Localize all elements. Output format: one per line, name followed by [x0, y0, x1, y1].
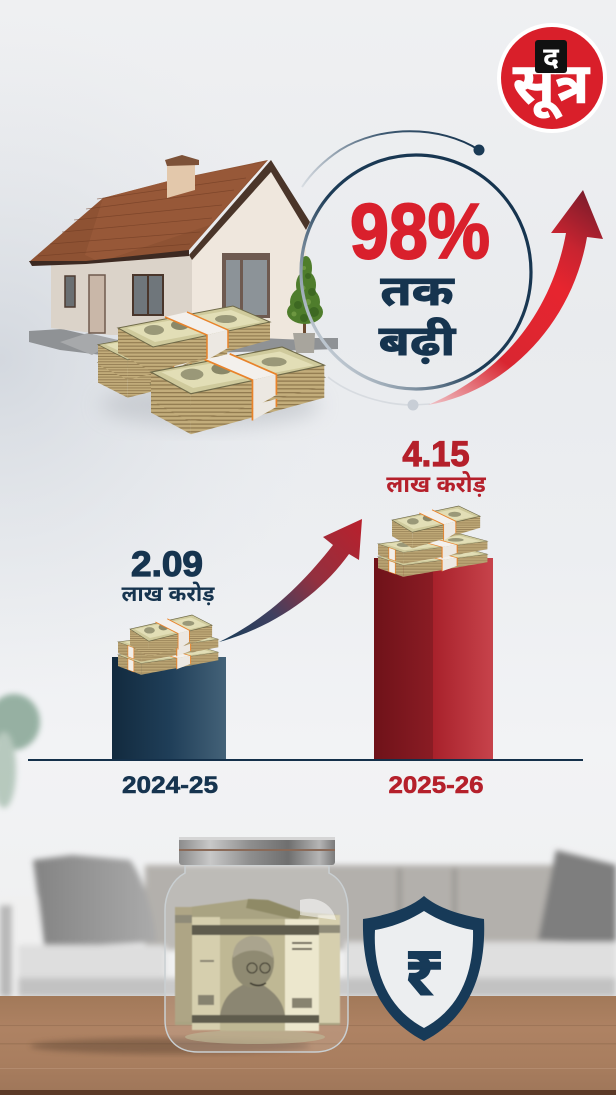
- money stacks by the house: [98, 306, 324, 434]
- jar with rupee notes: [30, 837, 348, 1054]
- chart: bars: [28, 435, 583, 799]
- money on right bar: [378, 506, 487, 577]
- logo: [497, 23, 607, 133]
- logo wordmark: सूत्र: [513, 52, 591, 120]
- logo mark: black square: द: [543, 42, 560, 73]
- window middle: [133, 275, 163, 315]
- tree: [287, 256, 323, 353]
- jar glass: [165, 865, 348, 1052]
- jar highlight: [300, 899, 336, 920]
- icon: rupee shield: [363, 896, 484, 1041]
- front wall: [51, 254, 192, 335]
- text: तक: तक: [380, 267, 455, 314]
- paper at bottom: [185, 1030, 325, 1044]
- unit: left: लाख करोड़: [122, 581, 215, 607]
- unit: right: लाख करोड़: [386, 471, 487, 498]
- roof eave: [29, 250, 189, 266]
- gable trim: [189, 160, 310, 260]
- value: 2.09: 2.09: [131, 545, 203, 584]
- chimney: [165, 155, 199, 198]
- background plant: [0, 694, 40, 808]
- value: 4.15: 4.15: [402, 435, 470, 474]
- lower arc with dot: [328, 377, 430, 410]
- roof: [29, 160, 268, 264]
- gable window: [222, 253, 270, 318]
- jar shadow: [30, 1038, 310, 1054]
- bar: 2025-26: [374, 558, 493, 760]
- label: 2024-25: 2024-25: [122, 772, 218, 799]
- window left: [65, 276, 75, 307]
- inner ring: [301, 155, 531, 389]
- money on left bar: [118, 615, 218, 675]
- label: 2025-26: 2025-26: [388, 772, 484, 799]
- house ground shadow: [100, 383, 320, 427]
- red arrow: [428, 190, 603, 405]
- panel: house: [29, 155, 338, 427]
- table: [0, 996, 616, 1095]
- jar lid: [179, 837, 335, 865]
- bar: 2024-25: [112, 657, 226, 760]
- blurred sofa: [0, 850, 616, 998]
- portrait: [220, 936, 285, 1015]
- icon: rupee shield: ₹: [404, 932, 444, 1010]
- door: [89, 275, 105, 333]
- notes at back: [175, 899, 340, 1025]
- note with portrait: [192, 917, 319, 1031]
- growth arrow: [219, 519, 362, 642]
- outer arc with dot: [302, 131, 484, 187]
- headline: 98%: 98%: [350, 187, 490, 275]
- axis: [28, 759, 583, 761]
- gable wall: [192, 172, 306, 340]
- house base: [29, 329, 338, 356]
- text: बढ़ी: बढ़ी: [379, 317, 457, 364]
- panel: growth circle: [301, 131, 603, 410]
